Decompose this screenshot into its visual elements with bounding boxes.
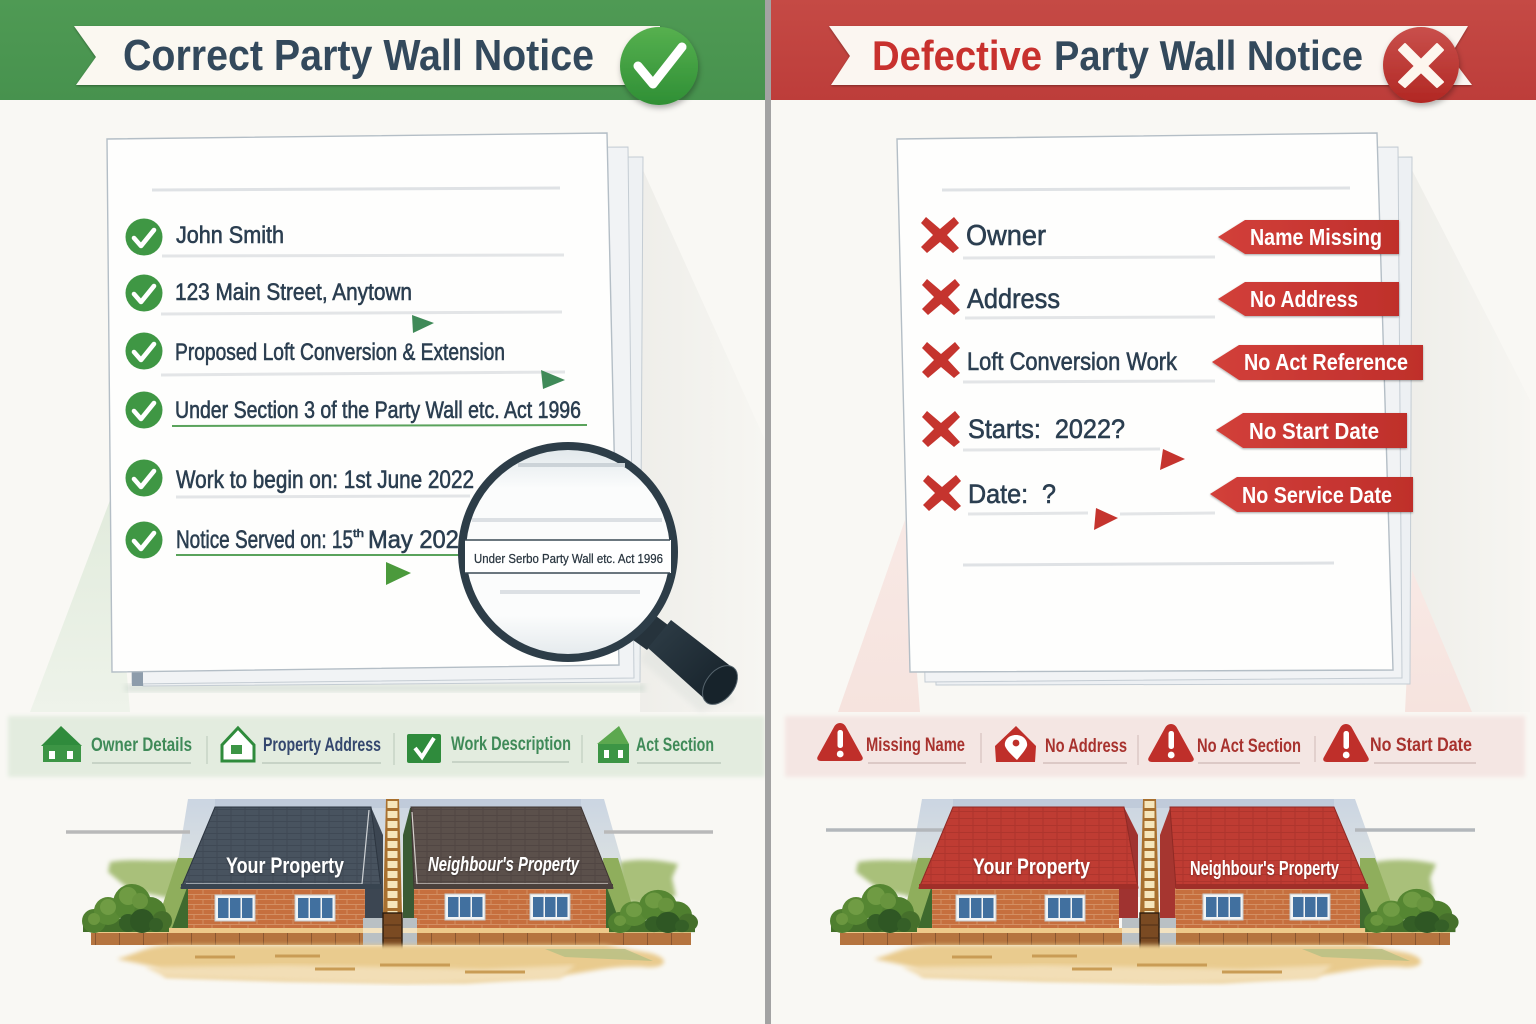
tag: no service date: No Service Date <box>1242 482 1392 508</box>
notice row: owner <box>921 217 1215 258</box>
paper shadow glow <box>838 170 1530 712</box>
party wall ladder <box>383 799 402 951</box>
label: act section: Act Section <box>636 735 714 756</box>
notice row: work: Proposed Loft Conversion & Extension <box>175 339 505 366</box>
notice row: address: Address <box>967 283 1060 314</box>
tag: no service date <box>1210 477 1413 512</box>
title word: defective: Defective <box>872 32 1042 79</box>
bush <box>82 884 172 933</box>
panel: defective notice <box>771 0 1536 984</box>
low wall <box>840 918 1450 945</box>
notice row: owner: John Smith <box>176 222 284 249</box>
handle <box>633 613 745 711</box>
title: Correct Party Wall Notice <box>123 31 594 80</box>
tag: no act reference <box>1212 345 1423 380</box>
ground <box>117 945 664 984</box>
tag: name missing: Name Missing <box>1250 224 1382 250</box>
field <box>856 858 935 928</box>
party wall ladder <box>1140 799 1159 951</box>
label: work description: Work Description <box>451 734 571 755</box>
bush <box>608 890 698 933</box>
notice row: act section: Under Section 3 of the Party Wall etc. Act 1996 <box>175 397 581 424</box>
notice row: work <box>922 342 1215 382</box>
house body <box>932 888 1119 928</box>
label: no address: No Address <box>1045 736 1127 757</box>
illustration: houses, correct <box>66 799 713 984</box>
tag: no address: No Address <box>1250 286 1358 312</box>
legend strip: defects <box>785 716 1525 777</box>
tag: no address <box>1218 282 1399 316</box>
icon: warning <box>1323 724 1369 762</box>
label: missing name: Missing Name <box>866 735 965 756</box>
roof: neighbour's property <box>411 807 613 889</box>
notice row: address <box>126 274 562 314</box>
tag: no act reference: No Act Reference <box>1244 349 1408 375</box>
paper shadow glow <box>30 170 765 712</box>
notice row: service date: May 2022 <box>368 526 472 554</box>
icon: leaf house <box>597 726 629 763</box>
field <box>1360 858 1436 928</box>
header bar: defective <box>771 0 1536 100</box>
roof: your property <box>919 807 1138 889</box>
gutter walls <box>365 807 416 918</box>
house body <box>188 888 365 928</box>
header bar: correct <box>0 0 765 100</box>
document stack <box>107 133 643 686</box>
roof: neighbour's property <box>1170 807 1368 889</box>
label: your property: Your Property <box>226 853 345 878</box>
notice row: address: 123 Main Street, Anytown <box>175 279 412 306</box>
notice row: start date <box>126 460 474 497</box>
ground <box>874 945 1421 984</box>
notice row: work: Loft Conversion Work <box>967 348 1177 376</box>
notice row: work <box>126 332 565 375</box>
document stack <box>897 133 1423 685</box>
illustration: houses, defective <box>826 799 1475 984</box>
icon: green check badge <box>620 27 698 105</box>
notice row: owner: Owner <box>966 220 1046 252</box>
notice row: start: Starts: 2022? <box>968 414 1125 444</box>
panel: correct notice <box>0 0 765 984</box>
icon: house <box>41 726 82 762</box>
magnifying glass <box>462 446 745 712</box>
label: owner details: Owner Details <box>91 735 192 756</box>
arrow marker <box>541 370 565 389</box>
windows <box>956 894 1330 921</box>
arrow marker <box>1094 508 1118 530</box>
notice row: address <box>922 279 1215 318</box>
label: neighbour's property: Neighbour's Property <box>1190 858 1340 880</box>
notice row: service date: Notice Served on: 15 <box>176 526 353 554</box>
arrow marker <box>412 315 434 333</box>
icon: red cross badge <box>1383 27 1459 103</box>
roof: your property <box>181 807 381 889</box>
magnified text: Under Serbo Party Wall etc. Act 1996 <box>474 551 663 566</box>
legend strip: correct items <box>8 716 765 777</box>
arrow marker <box>1160 449 1185 470</box>
tag: name missing <box>1218 220 1399 254</box>
bush <box>1364 889 1459 933</box>
title ribbon: defective <box>829 26 1472 85</box>
house body <box>414 888 606 928</box>
notice row: date: Date: ? <box>968 479 1056 509</box>
icon: warning <box>1148 724 1194 762</box>
field <box>108 858 195 928</box>
label: no act section: No Act Section <box>1197 736 1301 757</box>
house body <box>1175 888 1360 928</box>
notice row: owner <box>126 218 564 256</box>
divider <box>765 0 771 1024</box>
title ribbon: correct <box>74 26 660 85</box>
notice row: service date <box>126 522 472 558</box>
notice row: start <box>922 411 1160 450</box>
label: your property: Your Property <box>973 854 1091 879</box>
icon: check box <box>407 734 441 763</box>
field <box>603 858 678 928</box>
tag: no start date <box>1216 413 1407 448</box>
bush <box>830 884 920 933</box>
low wall <box>91 918 691 945</box>
label: no start date: No Start Date <box>1370 735 1472 756</box>
notice row: date <box>923 475 1215 514</box>
icon: warning <box>817 723 863 761</box>
arrow marker <box>386 562 411 585</box>
icon: outlined house <box>222 728 254 761</box>
label: neighbour's property: Neighbour's Property <box>428 854 580 876</box>
notice row: start date: Work to begin on: 1st June 2022 <box>176 466 474 494</box>
tag: no start date: No Start Date <box>1249 418 1379 444</box>
title words: Party Wall Notice <box>1054 32 1363 79</box>
gutter walls <box>1119 807 1176 918</box>
icon: home pin <box>995 726 1036 762</box>
windows <box>215 894 570 921</box>
label: property address: Property Address <box>263 735 381 756</box>
notice row: service date: th <box>353 528 364 540</box>
notice row: act section <box>126 392 587 428</box>
